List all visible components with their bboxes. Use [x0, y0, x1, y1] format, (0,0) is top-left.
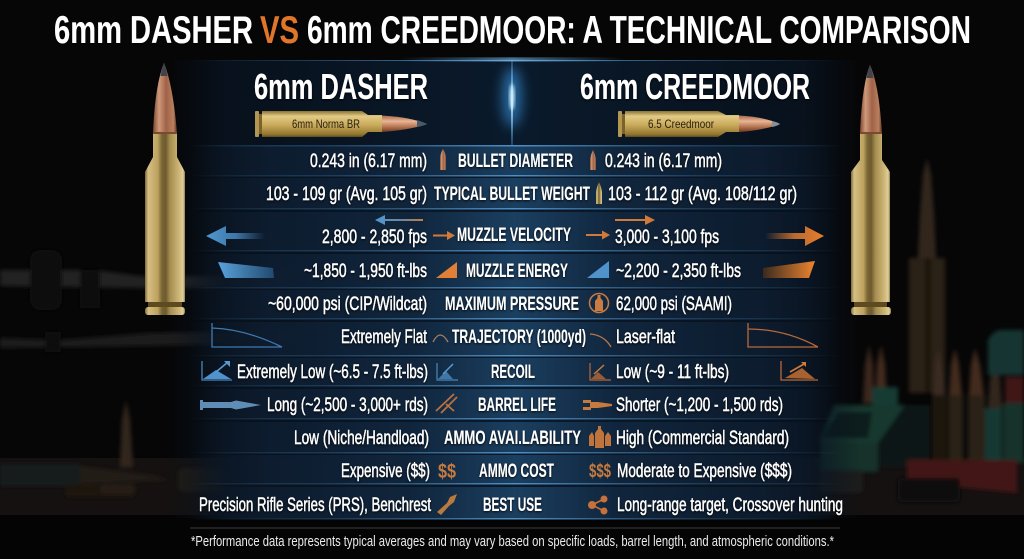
row: trajectory: Extremely Flat	[341, 327, 428, 348]
row: barrel life: Long (~2,500 - 3,000+ rds)	[267, 395, 428, 416]
row: maximum pressure: MAXIMUM PRESSURE	[445, 294, 579, 315]
row: muzzle velocity	[206, 215, 824, 248]
row: muzzle velocity: 3,000 - 3,100 fps	[615, 227, 719, 248]
row: muzzle velocity: MUZZLE VELOCITY	[457, 225, 571, 246]
cartridge: small 6mm Norma BR	[255, 111, 427, 137]
row: muzzle energy: ~1,850 - 1,950 ft-lbs	[304, 261, 427, 282]
row: bullet diameter: 0.243 in (6.17 mm)	[310, 151, 427, 172]
icon: large blue wedge	[218, 262, 274, 278]
chart: left trajectory	[212, 323, 282, 347]
icon: ammo bottles	[589, 426, 611, 448]
icon: small blue arrow	[375, 215, 423, 225]
icon: bullet weight	[596, 182, 602, 204]
icon: orange barrel	[583, 400, 612, 410]
row: ammo cost	[341, 461, 792, 483]
row: best use	[199, 494, 843, 516]
row bands	[190, 145, 840, 520]
icon: double dollar: $$	[438, 461, 456, 483]
footer divider	[190, 528, 840, 529]
icon: small orange arrow top	[615, 215, 655, 225]
row: ammo availability: Low (Niche/Handload)	[294, 428, 429, 449]
row: recoil: Low (~9 - 11 ft-lbs)	[616, 362, 729, 383]
row: muzzle energy	[218, 261, 815, 282]
heading: 6mm Dasher: 6mm DASHER	[254, 66, 428, 107]
row: trajectory: TRAJECTORY (1000yd)	[452, 327, 586, 348]
row: ammo cost: Moderate to Expensive ($$$)	[617, 461, 792, 482]
icon: triple dollar: $$$	[589, 461, 611, 482]
row: bullet diameter	[310, 149, 722, 172]
icon: share nodes	[588, 496, 607, 514]
title	[54, 9, 971, 52]
icon: large orange recoil	[781, 361, 818, 380]
icon: small orange arrow right	[586, 230, 610, 240]
row: typical bullet weight: TYPICAL BULLET WEIGHT	[434, 184, 590, 205]
row: recoil: RECOIL	[491, 362, 535, 383]
icon: bullet left	[440, 149, 446, 170]
row: best use: Long-range target, Crossover hunting	[617, 495, 843, 516]
icon: orange triangle	[436, 262, 457, 278]
row: muzzle energy: MUZZLE ENERGY	[466, 261, 568, 282]
title: VS	[260, 9, 299, 52]
row: barrel life	[200, 394, 783, 416]
cartridge: large left	[145, 63, 185, 315]
row: trajectory	[212, 323, 818, 348]
row: recoil: Extremely Low (~6.5 - 7.5 ft-lbs)	[237, 362, 428, 383]
row: recoil	[202, 361, 818, 383]
row: ammo availability	[294, 426, 789, 449]
row: ammo cost: Expensive ($$)	[341, 461, 430, 482]
cartridge: large right	[851, 65, 891, 315]
row: barrel life: Shorter (~1,200 - 1,500 rds)	[616, 395, 783, 416]
icon: large orange wedge	[763, 261, 815, 278]
row: maximum pressure: ~60,000 psi (CIP/Wildcat)	[268, 294, 427, 315]
icon: small orange arrow left	[433, 231, 455, 240]
icon: trajectory arc	[433, 335, 448, 342]
cartridge: small 6mm Norma BR: 6mm Norma BR	[292, 117, 360, 131]
icon: large blue recoil	[202, 361, 232, 380]
chart: right trajectory	[748, 323, 818, 347]
row: best use: Precision Rifle Series (PRS), Benchrest	[199, 495, 431, 516]
icon: small orange recoil	[590, 363, 611, 380]
cartridge: small 6.5 Creedmoor: 6.5 Creedmoor	[648, 117, 714, 131]
row: barrel life: BARREL LIFE	[478, 395, 556, 416]
icon: large blue arrow	[206, 226, 265, 246]
icon: pressure gauge	[590, 294, 608, 312]
icon: blue cartridge	[200, 400, 261, 410]
row: typical bullet weight	[266, 182, 797, 205]
row: muzzle energy: ~2,200 - 2,350 ft-lbs	[616, 261, 741, 282]
row: trajectory: Laser-flat	[616, 327, 676, 348]
row: ammo cost: AMMO COST	[479, 461, 554, 482]
icon: crossed barrels	[436, 394, 457, 413]
title: 6mm DASHER	[54, 9, 253, 52]
row: typical bullet weight: 103 - 109 gr (Avg. 105 gr)	[266, 184, 427, 205]
icon: large orange arrow	[765, 226, 824, 246]
row: maximum pressure: 62,000 psi (SAAMI)	[616, 294, 732, 315]
icon: trajectory curve	[590, 334, 611, 347]
row: maximum pressure	[268, 294, 732, 315]
row: bullet diameter: 0.243 in (6.17 mm)	[605, 151, 722, 172]
central blue panel	[170, 58, 860, 518]
icon: blue triangle	[587, 261, 609, 278]
cartridge: small 6.5 Creedmoor	[618, 111, 780, 137]
row: best use: BEST USE	[483, 495, 542, 516]
row: ammo availability: AMMO AVAI.LABILITY	[444, 428, 581, 449]
heading: 6mm Creedmoor: 6mm CREEDMOOR	[580, 66, 810, 107]
icon: diagonal cartridge	[437, 494, 457, 515]
row: muzzle velocity: 2,800 - 2,850 fps	[322, 227, 427, 248]
icon: bullet right	[590, 150, 596, 170]
row: typical bullet weight: 103 - 112 gr (Avg. 108/112 gr)	[608, 184, 797, 205]
icon: small blue recoil	[437, 363, 458, 380]
blurred tall cartridge	[918, 158, 936, 258]
row: bullet diameter: BULLET DIAMETER	[458, 151, 573, 172]
row: ammo availability: High (Commercial Standard)	[616, 428, 789, 449]
